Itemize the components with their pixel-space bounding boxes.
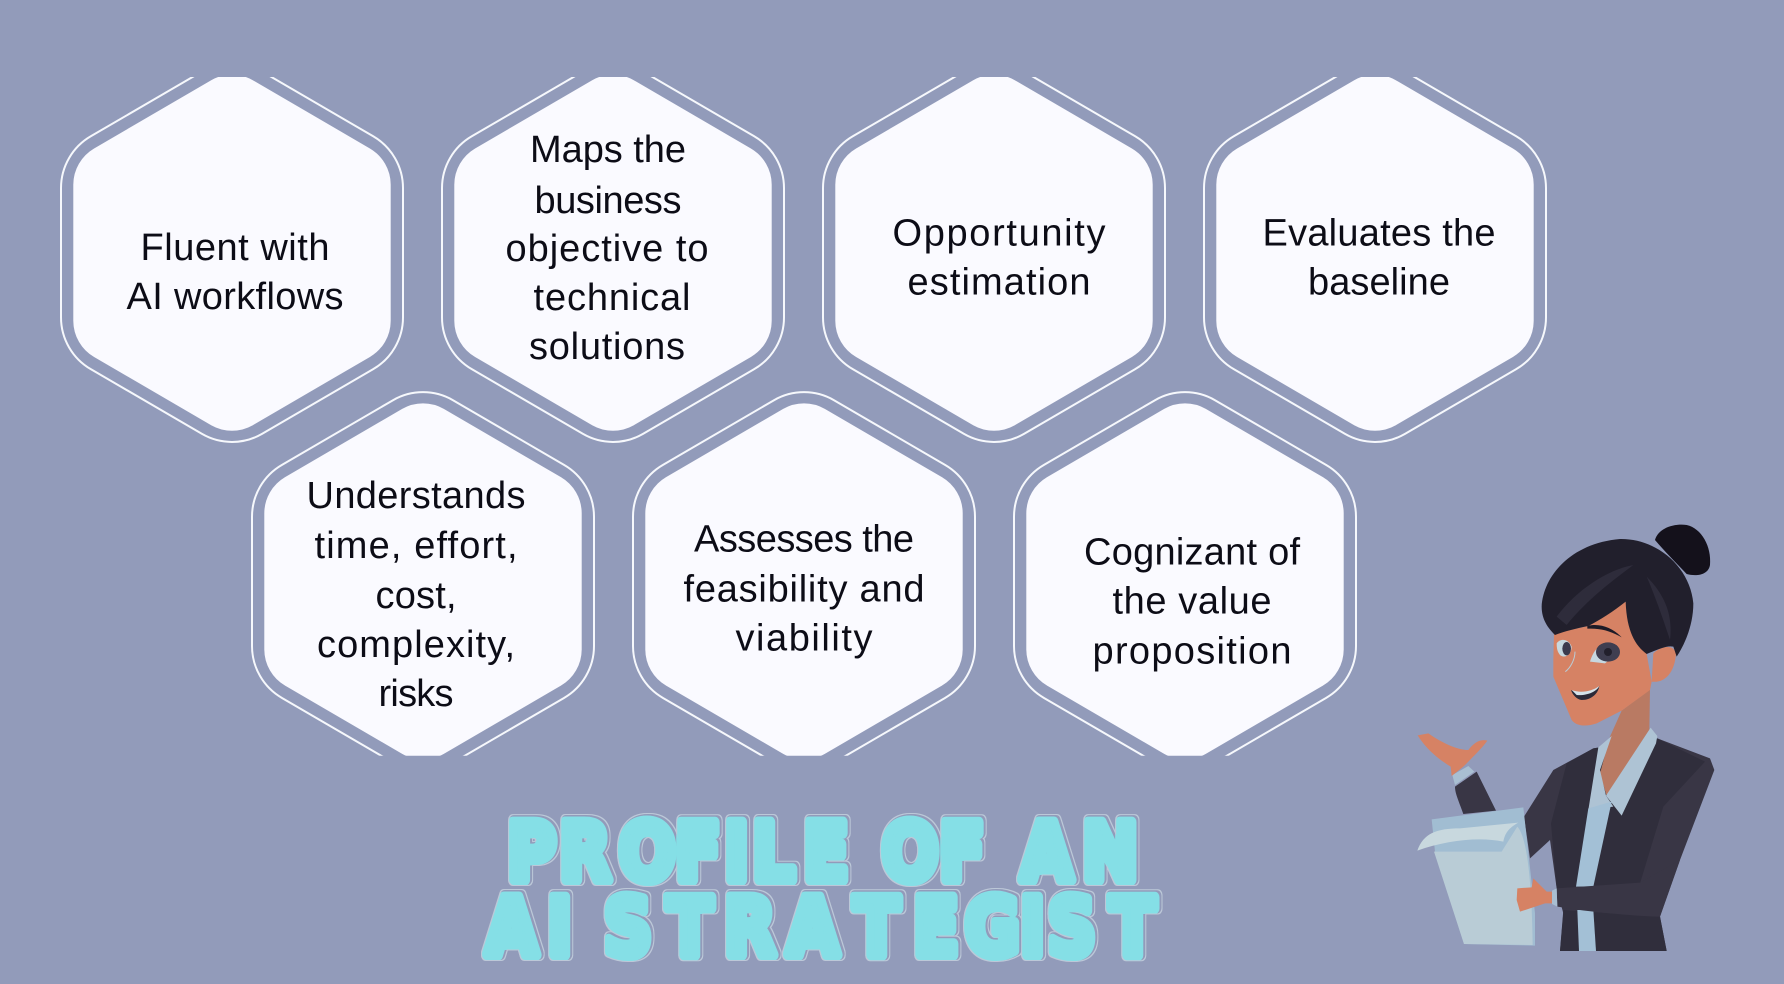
hexagon: Evaluates the baseline: baseline — [1308, 262, 1450, 304]
raised arm and hand — [1418, 733, 1496, 814]
head — [1542, 525, 1710, 726]
hexagon: Understands time, effort, cost: risks — [378, 673, 454, 715]
hexagon: Cognizant of the value proposition: Cognizant of — [1084, 531, 1300, 573]
hexagon: Opportunity estimation — [823, 63, 1165, 442]
hexagon: Assesses feasibility: Assesses the — [694, 518, 914, 560]
hexagon: Fluent with AI workflows — [61, 63, 403, 442]
hexagon: Opportunity estimation: estimation — [908, 262, 1090, 304]
hexagon: Assesses feasibility — [633, 392, 975, 771]
hexagon grid — [61, 63, 1546, 771]
hexagon: Cognizant of the value proposition: proposition — [1092, 630, 1292, 672]
face details — [1557, 625, 1622, 700]
hexagon: Opportunity estimation: Opportunity — [892, 213, 1106, 255]
hexagon: Fluent with AI workflows: AI workflows — [126, 276, 344, 318]
hexagon: Understands time, effort, cost: time, effort, — [314, 525, 518, 567]
title: AI STRATEGIST — [485, 883, 1155, 974]
hexagon: Understands time, effort, cost: cost, — [376, 575, 456, 617]
hexagon: Maps the business objective: business — [534, 180, 682, 222]
hexagon: Maps the business objective: technical — [534, 277, 690, 319]
holding hand — [1517, 878, 1557, 912]
hexagon: Maps the business objective: Maps the — [530, 129, 686, 171]
title: PROFILE OF AN — [507, 808, 1138, 899]
title — [485, 808, 1155, 974]
hexagon: Fluent with AI workflows: Fluent with — [140, 227, 330, 269]
hexagon: Evaluates the baseline: Evaluates the — [1262, 213, 1496, 255]
hexagon: Assesses feasibility: feasibility and — [684, 568, 924, 610]
blouse collar — [1576, 728, 1657, 951]
hexagon: Understands time, effort, cost — [252, 392, 594, 771]
neck — [1600, 689, 1650, 796]
illustration: woman presenting with notepad — [1417, 525, 1714, 951]
hexagon: Understands time, effort, cost: Understands — [306, 475, 526, 517]
hexagon: Cognizant of the value proposition — [1014, 392, 1356, 771]
jacket — [1524, 738, 1714, 951]
hexagon: Cognizant of the value proposition: the value — [1112, 580, 1272, 622]
hexagon: Maps the business objective: objective to — [506, 228, 708, 270]
hexagon: Maps the business objective — [442, 63, 784, 442]
forearm — [1557, 860, 1680, 917]
hexagon: Evaluates the baseline — [1204, 63, 1546, 442]
hexagon: Assesses feasibility: viability — [736, 617, 872, 659]
hexagon: Understands time, effort, cost: complexity, — [317, 624, 515, 666]
notepad — [1417, 807, 1535, 946]
hexagon: Maps the business objective: solutions — [529, 326, 685, 368]
